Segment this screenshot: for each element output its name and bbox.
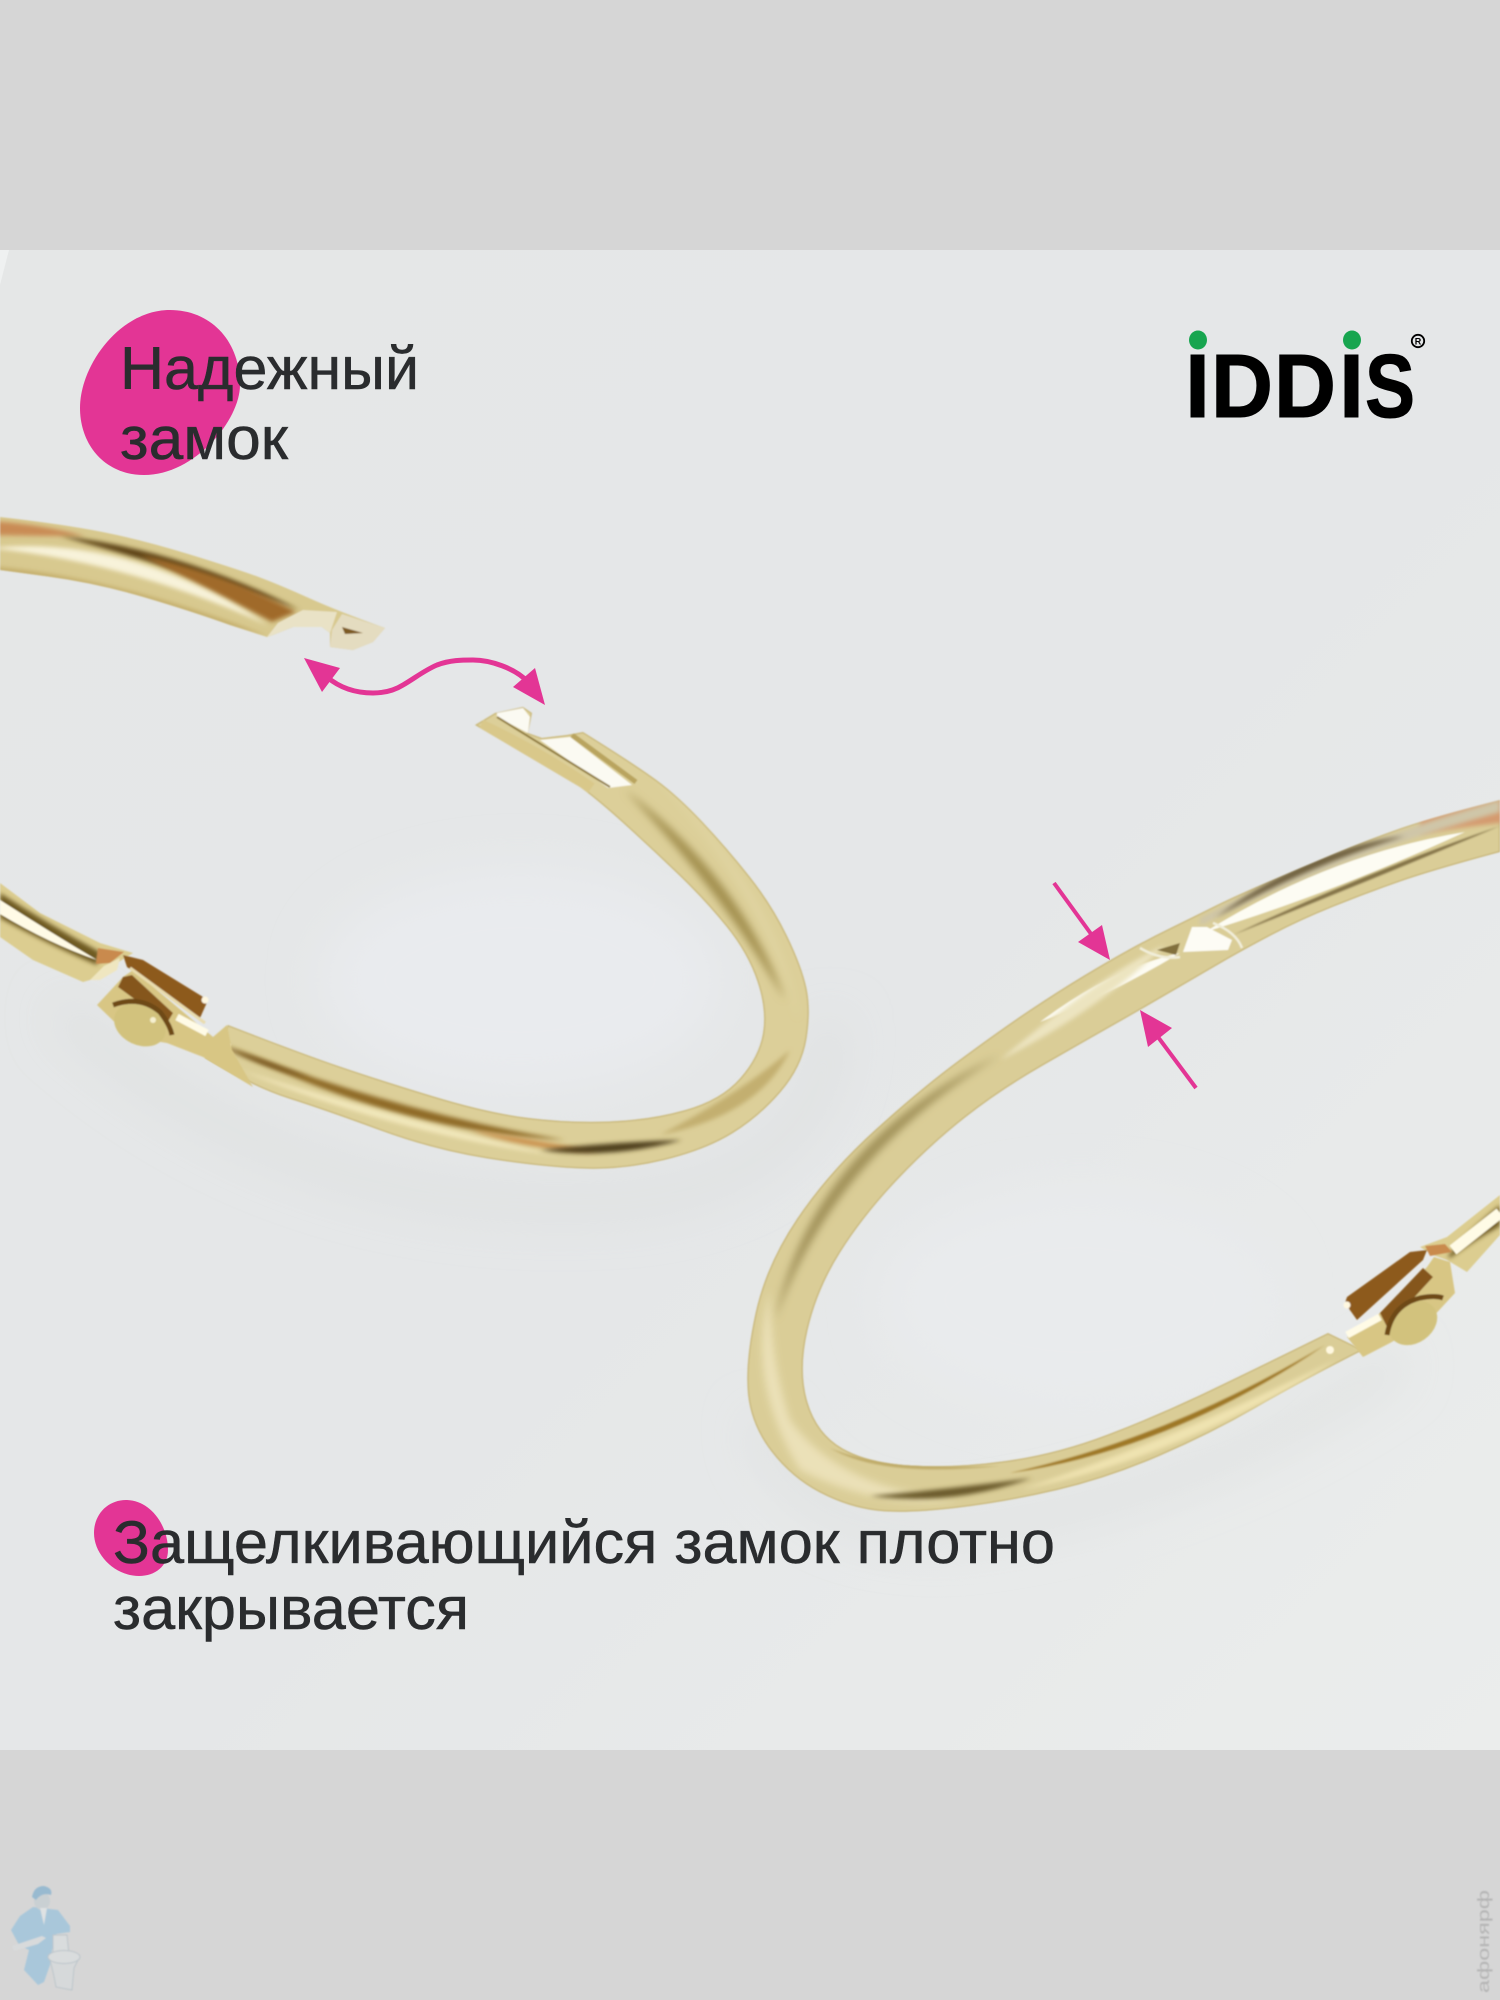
logo: IDDIS: R [1415,336,1422,346]
ring 1: main curved body [205,707,809,1169]
pink blob behind heading [80,310,240,475]
ring 1: hinge with rivet [0,883,253,1087]
pink blob behind caption [94,1500,168,1576]
logo: IDDIS: I [1339,337,1364,437]
ring 2: hinge with rivet [1326,1195,1500,1357]
heading [120,335,419,472]
photo panel background [0,250,1500,1750]
arrow: lower pointing to closed lock [1140,1010,1196,1088]
watermark: plumber leaning on toilet [11,1886,80,1990]
logo: IDDIS [1185,330,1424,437]
logo: IDDIS: D [1211,337,1273,437]
arrow: upper pointing to closed lock [1054,883,1110,960]
logo: IDDIS: D [1274,337,1336,437]
logo: IDDIS: I [1185,337,1210,437]
ring 1: open ring, upper end with lock [0,517,385,650]
caption [113,1509,1055,1642]
ring 2: closed ring with lock [747,798,1500,1512]
logo: IDDIS: S [1365,337,1415,437]
heading: Надежный [120,335,419,402]
caption: закрывается [113,1575,469,1642]
heading: замок [120,405,289,472]
double arrow between lock ends [304,658,545,705]
watermark: vertical site text: афонярф [1474,1890,1493,1993]
caption: Защелкивающийся замок плотно [113,1509,1055,1576]
